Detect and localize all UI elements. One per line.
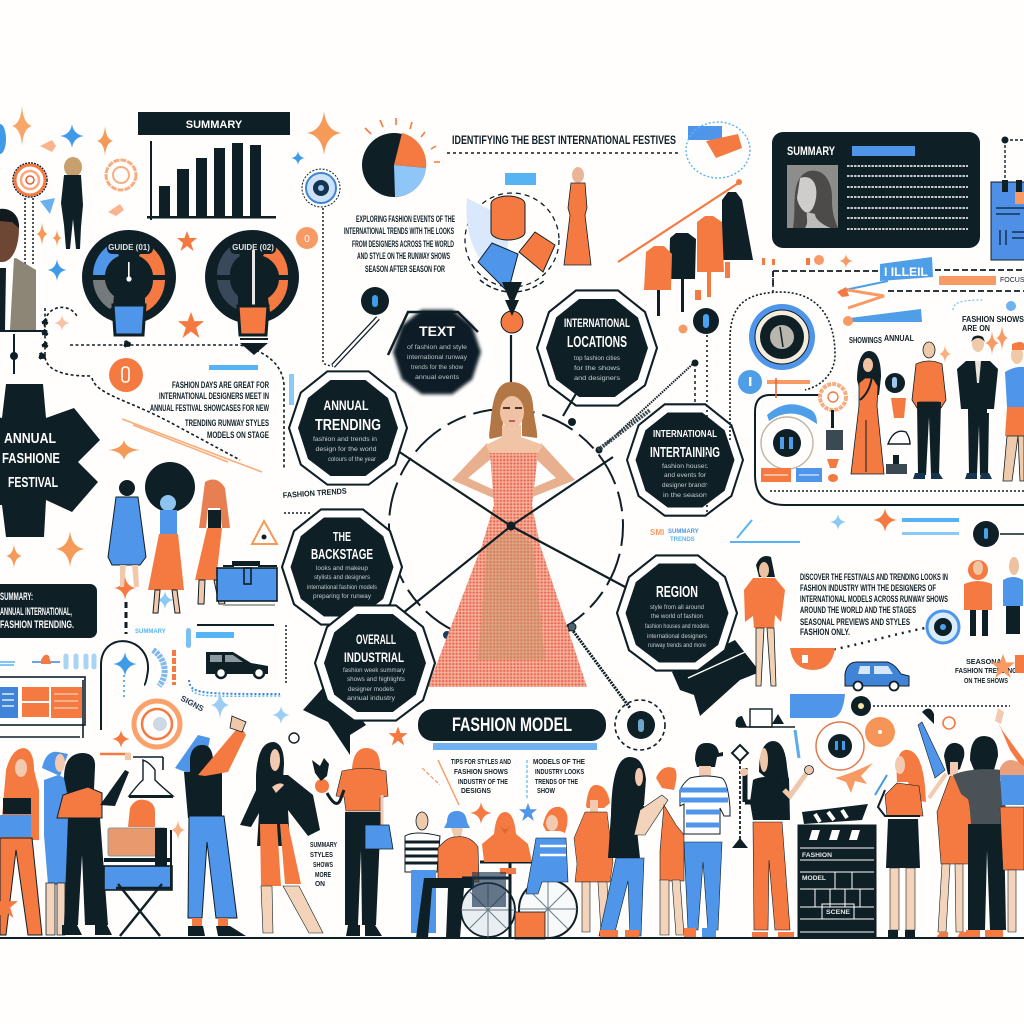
node: location hexagon: and designers (574, 375, 621, 382)
figure orange hair (195, 480, 230, 604)
summary box bottom left (0, 584, 97, 638)
crowd: person 9 hooded orange (482, 812, 532, 862)
node: annual trending hexagon: TRENDING (315, 417, 381, 434)
gear title: ANNUAL (4, 430, 56, 447)
paragraph center top: FROM DESIGNERS ACROSS THE WORLD (352, 239, 454, 249)
paragraph right middle (800, 572, 948, 638)
crowd: person 15 black top orange pants (740, 741, 814, 938)
summary bar chart (138, 112, 290, 220)
node: text hexagon top (388, 310, 481, 394)
crowd: person 1 orange (0, 748, 42, 935)
small note text lower center: FASHION SHOWS (454, 769, 508, 776)
clapperboard: MODEL (802, 876, 826, 882)
node: overall hexagon: fashion week summary (343, 667, 406, 674)
paragraph center top: AND STYLE ON THE RUNWAY SHOWS (357, 251, 450, 261)
node: region hexagon (617, 555, 745, 678)
man in suit portrait (0, 209, 45, 374)
dashed vertical connector (124, 602, 128, 634)
node: annual trending hexagon (289, 371, 407, 485)
node: location hexagon: INTERNATIONAL (564, 316, 630, 330)
presentation board (0, 677, 85, 738)
node: region hexagon: the world of fashion (651, 613, 703, 620)
hair back (489, 382, 537, 439)
gauge right: GUIDE (02) (232, 243, 274, 252)
connector rods (323, 318, 695, 708)
car with dashed frame: SIGNS (179, 694, 206, 714)
connector from top to model (480, 280, 545, 382)
dark circle behind figure (145, 462, 195, 512)
text block left middle: MODELS ON STAGE (207, 430, 269, 441)
icon row lower right: ON THE SHOWS (964, 678, 1008, 685)
node: region hexagon: style from all around (650, 604, 704, 611)
man black suit (957, 336, 998, 479)
spiral medallion left (13, 163, 47, 265)
central crossing lines (392, 447, 627, 613)
arch icon with blue star (101, 641, 174, 730)
node: annual trending hexagon: colours of the year (328, 456, 377, 463)
banner row right (762, 254, 1024, 326)
node: text hexagon top: international runway (407, 354, 468, 361)
legend row mid right: SUMMARY (668, 529, 699, 535)
gauge left: GUIDE (01) (108, 243, 150, 252)
text right top small (849, 300, 1024, 363)
figure blue coat (108, 480, 146, 587)
top heading text (447, 122, 750, 178)
gear with festival title (0, 384, 100, 537)
node: annual trending hexagon: design for the world (316, 446, 377, 453)
text block left middle: FASHION DAYS ARE GREAT FOR (172, 380, 269, 391)
paragraph right middle: FASHION INDUSTRY WITH THE DESIGNERS OF (800, 583, 936, 594)
gear title line 3: FESTIVAL (8, 474, 58, 491)
central model in gown (428, 382, 587, 687)
icon row lower right: SEASONAL (966, 659, 1007, 666)
paragraph center top: SEASON AFTER SEASON FOR (365, 264, 445, 274)
clapperboard: FASHION (802, 853, 832, 859)
small note text lower center: SHOW (537, 788, 555, 795)
node: overall hexagon: designer models (348, 686, 395, 693)
orange eye icon cluster (795, 717, 955, 795)
ribbon under overall hexagon (303, 680, 366, 755)
icon row lower right (790, 611, 1024, 718)
node: annual trending hexagon: fashion and trends in (313, 436, 377, 443)
banner row right: FOCUS (1000, 277, 1024, 284)
gauge left (82, 230, 176, 335)
lamp prop (129, 757, 173, 798)
node: text hexagon top: of fashion and style (407, 344, 467, 351)
pie chart with rays (362, 118, 440, 197)
node: region hexagon: REGION (656, 584, 698, 601)
text block left middle: TRENDING RUNWAY STYLES (185, 418, 269, 429)
node: text hexagon top: TEXT (419, 323, 455, 339)
node: text hexagon top: annual events (415, 374, 460, 381)
small note text lower center: SHOWS (313, 862, 333, 869)
crowd: person 19 right edge (995, 708, 1024, 932)
blue brain medallion (730, 272, 835, 440)
crowd: person 5 black jacket (240, 742, 329, 933)
gown (428, 453, 587, 687)
crowd: person 18 gray top (953, 736, 1006, 938)
title pill fashion model: FASHION MODEL (452, 715, 572, 736)
shoulders (486, 425, 543, 454)
icon cluster: diagram shapes (465, 173, 559, 306)
small icon row left (0, 655, 94, 667)
crowd: person 2 blue dress (42, 752, 70, 935)
icons beside figure (885, 373, 910, 474)
title pill fashion model (418, 709, 606, 750)
figures mid right edge (964, 557, 1023, 636)
man orange sweater (912, 342, 946, 479)
small note text lower center: INDUSTRY LOOKS (535, 769, 584, 776)
icon row lower right: FASHION TRENDING (955, 668, 1017, 675)
star bottom left (0, 892, 18, 918)
icon: orange numbered badge (109, 358, 143, 392)
ground line (0, 937, 1024, 939)
suitcase (217, 562, 277, 606)
node: backstage hexagon: looks and makeup (316, 565, 368, 572)
stakeholder icon group right (761, 378, 846, 482)
small label left of circle (283, 487, 348, 513)
person partial right edge (1003, 342, 1024, 481)
figure orange dress top (564, 167, 591, 265)
circle badge bottom of model (615, 700, 665, 750)
summary box bottom left: FASHION TRENDING. (0, 619, 74, 631)
wheelchair (461, 862, 577, 939)
crowd: person 12 black top (599, 757, 668, 937)
text right top small: SHOWINGS (849, 336, 882, 345)
small note text lower center: MODELS OF THE (533, 759, 585, 766)
legend row mid right: TRENDS (670, 537, 695, 543)
small note text lower center: STYLES (310, 852, 333, 859)
node: overall hexagon: OVERALL (356, 631, 396, 647)
node: location hexagon: LOCATIONS (567, 334, 627, 351)
small note text lower center: TIPS FOR STYLES AND (451, 759, 511, 766)
floral on stand (820, 384, 846, 410)
figure orange gown right (851, 351, 884, 474)
node: backstage hexagon: stylists and designers (314, 574, 371, 581)
node: international hexagon right: in the season (663, 492, 707, 499)
paragraph center top: EXPLORING FASHION EVENTS OF THE (356, 214, 455, 224)
crowd: person 17 orange dress (918, 708, 976, 938)
orange swirl (112, 691, 290, 748)
ribbon under region hexagon (672, 640, 760, 716)
paragraph center top: INTERNATIONAL TRENDS WITH THE LOOKS (344, 226, 454, 236)
rounded dashed panel right (755, 395, 1024, 505)
chart title bar: SUMMARY (186, 119, 243, 131)
crowd: person 3 orange top (57, 753, 131, 935)
small note text lower center: ON (315, 881, 325, 888)
clapperboard (798, 804, 876, 938)
node: international hexagon right (627, 404, 743, 516)
node: backstage hexagon: BACKSTAGE (311, 546, 373, 563)
node: overall hexagon (315, 605, 435, 721)
node: international hexagon right: and events for (664, 472, 707, 479)
node: international hexagon right: fashion houses (662, 463, 709, 470)
text block left middle: INTERNATIONAL DESIGNERS MEET IN (159, 391, 269, 402)
node dots and badges (361, 287, 762, 512)
icon: orange badge small (296, 227, 318, 249)
small note text lower center: INDUSTRY OF THE (458, 779, 508, 786)
portrait (787, 165, 838, 228)
node: international hexagon right: INTERTAINING (650, 444, 720, 461)
text right top small: ARE ON (962, 324, 990, 333)
small note text lower center (289, 726, 585, 888)
arms (452, 443, 503, 500)
summary box bottom left: SUMMARY: (0, 591, 33, 603)
text block left middle (122, 365, 294, 472)
icon: orange badge small: 0 (304, 234, 310, 245)
icon: warning triangle (252, 521, 277, 544)
crowd: person 14 striped shirt cap (679, 743, 730, 938)
small note text lower center: TRENDS OF THE (535, 779, 578, 786)
node: overall hexagon: annual industry (347, 695, 396, 702)
top heading text: IDENTIFYING THE BEST INTERNATIONAL FESTIVES (452, 133, 676, 147)
paragraph right middle: FASHION ONLY. (800, 627, 850, 638)
blue collar (767, 404, 817, 424)
summary card right (772, 132, 980, 248)
small note text lower center: SUMMARY (310, 842, 337, 849)
crowd: person 16 orange top black skirt (878, 750, 926, 938)
decorative stars top left (0, 106, 341, 338)
crowd: person 11 orange dress (574, 785, 613, 932)
node: overall hexagon: shows and highlights (347, 676, 406, 683)
node: location hexagon: top fashion cities (574, 355, 621, 362)
text right top small: ANNUAL (884, 334, 914, 343)
clapperboard: SCENE (826, 910, 850, 916)
node: backstage hexagon (282, 509, 402, 625)
chart title bar (138, 112, 290, 135)
car with dashed frame (179, 625, 286, 714)
director chair with bag (104, 800, 185, 936)
crowd: person 10 blue shirt (526, 807, 568, 894)
crowd: person 7 striped (405, 812, 440, 933)
figure orange skirt (148, 495, 184, 613)
figure orange sweater right mid (744, 556, 785, 686)
stars around gear (6, 440, 174, 609)
summary card right: SUMMARY (787, 144, 835, 158)
small black figure top left (61, 157, 83, 249)
node: annual trending hexagon: ANNUAL (324, 397, 369, 413)
icon: blue ring medallion (302, 169, 340, 360)
crowd: person 13 orange behind (656, 767, 684, 935)
paragraph right middle: AROUND THE WORLD AND THE STAGES (800, 605, 916, 616)
label strip blue: SUMMARY (135, 629, 166, 635)
node: region hexagon: international designers (647, 633, 708, 640)
paragraph center top (344, 214, 455, 274)
node: backstage hexagon: preparing for runway (313, 593, 372, 600)
gear title line 2: FASHIONE (2, 450, 60, 467)
small note text lower center: DESIGNS (461, 788, 491, 795)
floral icon orange (106, 160, 136, 216)
crowd: person 8 blue hat (416, 811, 479, 938)
hanging clothes on rack (618, 179, 753, 316)
gauge right (205, 230, 299, 355)
node: location hexagon: for the shows (574, 365, 621, 372)
node: backstage hexagon: international fashion models (307, 584, 378, 591)
node: location hexagon (537, 290, 657, 416)
node: overall hexagon: INDUSTRIAL (344, 649, 404, 665)
text block left middle: ANNUAL FESTIVAL SHOWCASES FOR NEW (150, 403, 269, 414)
crowd: person 6 orange top bag (327, 748, 393, 936)
banner row right: I ILLEIL (884, 265, 928, 279)
blue clipboard right (991, 136, 1024, 260)
dashed connector left (39, 307, 284, 470)
node: region hexagon: fashion houses and models (645, 623, 710, 630)
figure group mid left (108, 462, 230, 613)
node: backstage hexagon: THE (333, 529, 351, 544)
legend row mid right (650, 508, 1024, 547)
node: international hexagon right: INTERNATIONAL (653, 429, 717, 440)
legend row mid right: SMI (650, 528, 664, 537)
node: international hexagon right: designer brands (662, 482, 709, 489)
props above crowd (732, 709, 795, 848)
crowd: person 4 arms raised (175, 716, 246, 936)
small note text lower center: MORE (315, 872, 331, 879)
node: text hexagon top: trends for the show (411, 364, 463, 371)
center dashed circle and lines (389, 409, 623, 652)
paragraph right middle: SEASONAL PREVIEWS AND STYLES (800, 617, 910, 628)
summary box bottom left: ANNUAL INTERNATIONAL, (0, 606, 72, 618)
node: region hexagon: runway trends and more (648, 642, 706, 649)
small label left of circle: FASHION TRENDS (283, 487, 348, 500)
